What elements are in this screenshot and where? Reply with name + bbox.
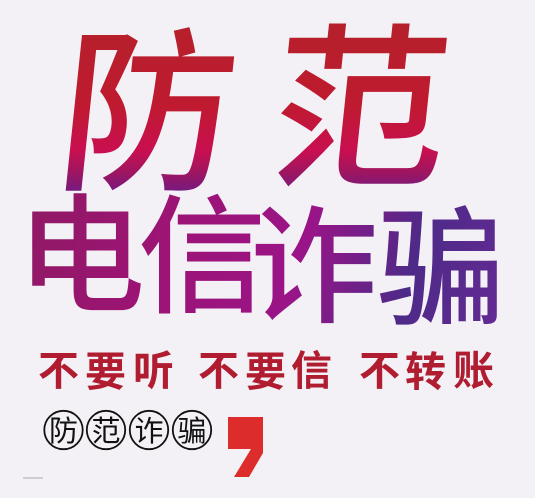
slogan: three warnings <box>38 348 494 395</box>
title: 防范: 防 <box>50 17 246 214</box>
tiny faint watermark smudge <box>23 477 43 479</box>
title: 防范 <box>50 13 459 214</box>
slogan: 不转账: 不 <box>359 348 400 394</box>
badge row: 防范诈骗 <box>44 411 211 449</box>
slogan: 不要听: 不 <box>38 348 79 394</box>
subtitle: 电信诈骗 <box>17 186 505 342</box>
slogan: 不要信: 不 <box>198 348 239 394</box>
subtitle: 电信诈骗: 电 <box>17 186 145 329</box>
slogan: 不要信 <box>198 348 332 395</box>
badge row: 防范诈骗: 骗 <box>177 415 207 448</box>
slogan: 不要信: 信 <box>291 348 332 394</box>
badge row: 防范诈骗: 诈 <box>134 416 164 448</box>
slogan: 不要听: 要 <box>85 349 126 395</box>
slogan: 不转账 <box>359 348 494 395</box>
subtitle: 电信诈骗: 信 <box>138 187 266 330</box>
subtitle: 电信诈骗: 诈 <box>250 197 378 340</box>
slogan: 不转账: 账 <box>453 348 494 394</box>
subtitle: 电信诈骗: 骗 <box>377 199 505 342</box>
badge row: 防范诈骗: 防 <box>49 415 78 448</box>
slogan: 不要听: 听 <box>133 348 174 394</box>
slogan: 不要信: 要 <box>245 349 286 395</box>
slogan: 不要听 <box>38 348 174 395</box>
icon: red comma mark <box>228 417 263 477</box>
title: 防范: 范 <box>262 13 459 210</box>
slogan: 不转账: 转 <box>405 349 446 395</box>
badge row: 防范诈骗: 范 <box>91 415 121 448</box>
